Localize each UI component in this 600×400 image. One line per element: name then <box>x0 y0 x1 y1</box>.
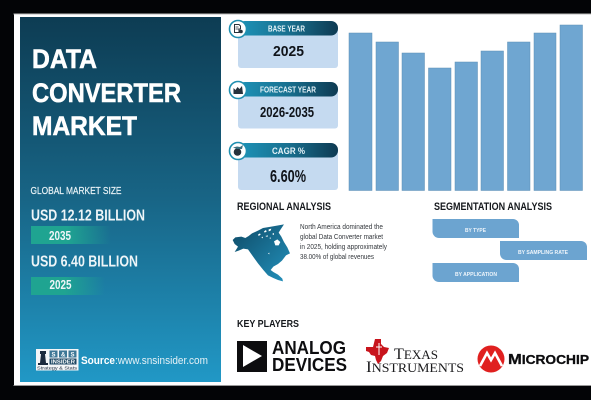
panel: forecast year: 2026-2035 <box>260 104 314 121</box>
heading: regional analysis: REGIONAL ANALYSIS <box>237 201 331 213</box>
icon: S&S Insider logo: S <box>70 352 75 358</box>
stat: 2025 market size: 2025 <box>50 277 72 292</box>
text: regional summary: in 2025, holding approximately <box>300 244 387 251</box>
panel: base year: 2025 <box>273 43 304 60</box>
stat: 2035 market size <box>31 208 145 244</box>
segment: by application <box>432 263 519 282</box>
icon: S&S Insider logo: & <box>61 352 66 358</box>
segment: by type: BY TYPE <box>465 228 486 234</box>
logo: Analog Devices <box>237 337 347 375</box>
panel: market summary <box>20 17 221 382</box>
logo: Texas Instruments: TEXAS <box>394 346 438 363</box>
title: MARKET <box>32 111 137 141</box>
panel: forecast year: FORECAST YEAR <box>260 85 316 95</box>
icon: North America map <box>233 224 290 281</box>
bar chart <box>349 25 582 190</box>
panel: CAGR: CAGR % <box>272 146 305 157</box>
icon: forecast year <box>230 82 246 98</box>
icon: S&S Insider logo <box>36 349 78 370</box>
panel: CAGR <box>230 142 338 190</box>
logo: Texas Instruments: INSTRUMENTS <box>366 359 464 376</box>
logo: Analog Devices: ANALOG <box>272 337 346 358</box>
title: CONVERTER <box>32 78 181 108</box>
segment: by type <box>432 219 519 238</box>
heading: segmentation analysis: SEGMENTATION ANALYSIS <box>434 201 552 213</box>
source line: Source:www.snsinsider.com <box>81 355 208 367</box>
stat: 2035 market size: 2035 <box>49 228 71 243</box>
heading: key players: KEY PLAYERS <box>237 319 299 330</box>
icon: S&S Insider logo: S <box>52 352 56 358</box>
panel: forecast year <box>230 82 338 128</box>
logo: Microchip: MICROCHIP <box>508 351 589 368</box>
title: DATA <box>32 44 97 74</box>
logo: Microchip <box>478 346 589 372</box>
segment: by sampling rate <box>500 241 587 260</box>
icon: CAGR <box>230 142 246 160</box>
heading: global market size: GLOBAL MARKET SIZE <box>30 186 122 197</box>
title <box>32 44 181 141</box>
stat: 2035 market size: USD 12.12 BILLION <box>31 208 145 224</box>
panel: base year <box>230 20 338 68</box>
icon: S&S Insider logo: INSIDER <box>51 360 75 366</box>
text: regional summary <box>300 224 387 261</box>
logo: Analog Devices: DEVICES <box>272 354 347 375</box>
stat: 2025 market size <box>31 254 138 295</box>
panel: CAGR: 6.60% <box>270 166 306 186</box>
logo: Texas Instruments <box>366 339 464 376</box>
segment: by sampling rate: BY SAMPLING RATE <box>518 250 568 256</box>
text: regional summary: North America dominated the <box>300 224 383 231</box>
text: regional summary: 38.00% of global revenues <box>300 254 374 261</box>
segment: by application: BY APPLICATION <box>455 272 497 278</box>
stat: 2025 market size: USD 6.40 BILLION <box>31 254 138 270</box>
text: regional summary: global Data Converter market <box>300 234 383 241</box>
icon: base year <box>230 20 246 38</box>
panel: base year: BASE YEAR <box>268 24 305 34</box>
icon: S&S Insider logo: Strategy & Stats <box>37 366 78 370</box>
